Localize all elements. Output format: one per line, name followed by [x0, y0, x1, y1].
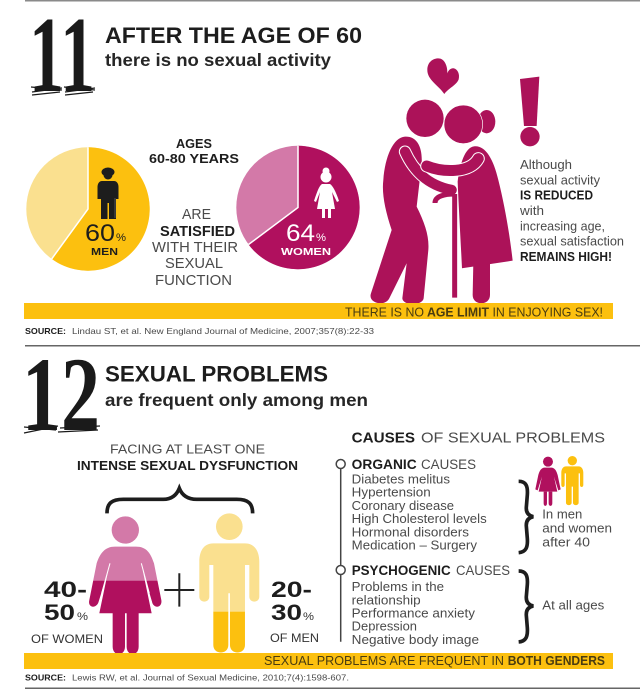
banner: both genders — [24, 653, 613, 669]
banner: both genders: BOTH GENDERS — [508, 653, 605, 668]
text: satisfaction remains high: Although — [520, 158, 572, 172]
value: 20-30% of men: 30 — [271, 600, 302, 625]
list: organic causes: Hypertension — [352, 486, 431, 500]
list: organic causes: High Cholesterol levels — [352, 512, 487, 526]
icon: exclamation mark — [520, 77, 540, 146]
icon: woman and man — [535, 456, 583, 506]
list: organic causes: Coronary disease — [352, 499, 454, 513]
text: facing at least one intense sexual dysfunction: INTENSE SEXUAL DYSFUNCTION — [77, 458, 298, 473]
list: psychogenic causes — [352, 563, 510, 647]
list: psychogenic causes: Performance anxiety — [352, 607, 476, 621]
value: 40-50% of women: 40- — [44, 577, 87, 602]
value: 40-50% of women: OF WOMEN — [31, 634, 103, 646]
icon: old man — [98, 168, 118, 219]
source: section 11: SOURCE: — [25, 326, 66, 336]
value: 64% women — [281, 220, 331, 258]
number 12: 12 — [22, 336, 100, 453]
value: 20-30% of men — [270, 577, 319, 645]
text: satisfaction remains high: with — [519, 204, 544, 218]
pie chart: women 64% — [236, 146, 360, 269]
banner: no age limit: IN ENJOYING SEX! — [492, 304, 603, 320]
value: 20-30% of men: % — [303, 611, 314, 623]
causes heading: OF SEXUAL PROBLEMS — [421, 430, 605, 447]
list: organic causes — [352, 457, 487, 553]
value: 60% men: % — [116, 232, 126, 244]
list: psychogenic causes: CAUSES — [456, 563, 510, 578]
list: organic causes: Diabetes melitus — [352, 472, 450, 486]
value: 60% men — [85, 220, 126, 258]
value: 40-50% of women — [31, 577, 103, 646]
text: in men and women after 40 — [542, 507, 612, 550]
text: at all ages: At all ages — [542, 598, 604, 612]
text: in men and women after 40: In men — [542, 507, 582, 521]
text: are satisfied with their sexual function: FUNCTION — [155, 272, 232, 289]
banner: no age limit: THERE IS NO — [345, 304, 424, 320]
icon: brace organic — [519, 481, 533, 553]
list: psychogenic causes: Problems in the — [352, 580, 444, 594]
plus sign — [164, 573, 194, 607]
subheading: are frequent only among men — [105, 390, 368, 410]
text: facing at least one intense sexual dysfunction — [77, 442, 298, 473]
figure: man 20-30% — [199, 513, 259, 652]
list: organic causes: Medication – Surgery — [352, 539, 478, 553]
text: are satisfied with their sexual function: ARE — [182, 206, 211, 223]
text: are satisfied with their sexual function — [152, 206, 238, 289]
source: section 12: Lewis RW, et al. Journal of Sexual Medicine, 2010;7(4):1598-607. — [72, 673, 349, 683]
value: 60% men: MEN — [91, 246, 118, 258]
pie chart: men 60% — [26, 147, 150, 271]
text: satisfaction remains high — [519, 158, 624, 264]
value: 20-30% of men: 20- — [271, 577, 312, 602]
number 11 — [29, 0, 95, 115]
text: are satisfied with their sexual function: SEXUAL — [165, 255, 223, 272]
icon: walking cane — [435, 194, 455, 298]
panel: section 11 — [24, 0, 624, 336]
list: organic causes: Hormonal disorders — [352, 525, 469, 539]
icon: top brace — [107, 488, 253, 513]
old woman figure — [427, 105, 513, 303]
banner: no age limit: AGE LIMIT — [427, 304, 489, 320]
list: psychogenic causes: Negative body image — [352, 633, 479, 647]
source: section 11: Lindau ST, et al. New England Journal of Medicine, 2007;357(8):22-33 — [72, 326, 374, 336]
value: 64% women: % — [316, 232, 326, 244]
figure: woman 40-50% — [89, 516, 161, 654]
text: satisfaction remains high: sexual satisfaction — [520, 235, 624, 249]
text: satisfaction remains high: increasing age, — [520, 219, 605, 233]
text: satisfaction remains high: IS REDUCED — [520, 189, 593, 203]
list: psychogenic causes: Depression — [352, 620, 417, 634]
ages label: AGES — [176, 137, 212, 151]
ages label: 60-80 YEARS — [149, 152, 239, 166]
value: 60% men: 60 — [85, 220, 115, 247]
text: facing at least one intense sexual dysfunction: FACING AT LEAST ONE — [110, 442, 265, 457]
text: satisfaction remains high: REMAINS HIGH! — [520, 250, 612, 264]
list: organic causes: CAUSES — [421, 457, 476, 472]
text: in men and women after 40: and women — [542, 522, 612, 536]
heading: SEXUAL PROBLEMS — [105, 362, 328, 387]
panel: section 12 — [22, 336, 613, 683]
list: psychogenic causes: PSYCHOGENIC — [352, 563, 451, 578]
banner: no age limit — [24, 303, 613, 320]
heading: AFTER THE AGE OF 60 — [105, 23, 362, 48]
text: are satisfied with their sexual function: SATISFIED — [160, 223, 235, 240]
icon: heart — [427, 58, 459, 94]
text: satisfaction remains high: sexual activity — [520, 173, 601, 187]
timeline — [336, 460, 345, 642]
subheading: there is no sexual activity — [105, 50, 331, 70]
value: 64% women: WOMEN — [281, 246, 331, 258]
ages label — [149, 137, 239, 166]
text: are satisfied with their sexual function: WITH THEIR — [152, 239, 238, 256]
list: organic causes: ORGANIC — [352, 457, 417, 472]
value: 40-50% of women: % — [77, 611, 88, 623]
list: psychogenic causes: relationship — [352, 593, 421, 607]
text: in men and women after 40: after 40 — [542, 536, 590, 550]
icon: old woman — [314, 168, 339, 218]
icon: brace psychogenic — [519, 571, 533, 642]
value: 20-30% of men: OF MEN — [270, 633, 319, 645]
source: section 12: SOURCE: — [25, 673, 66, 683]
value: 40-50% of women: 50 — [44, 600, 75, 625]
illustration: elderly couple kissing — [371, 58, 513, 304]
old man figure — [371, 100, 452, 304]
value: 64% women: 64 — [286, 220, 315, 247]
causes heading — [352, 430, 605, 447]
banner: both genders: SEXUAL PROBLEMS ARE FREQUENT IN — [264, 653, 504, 668]
causes heading: CAUSES — [352, 430, 415, 447]
